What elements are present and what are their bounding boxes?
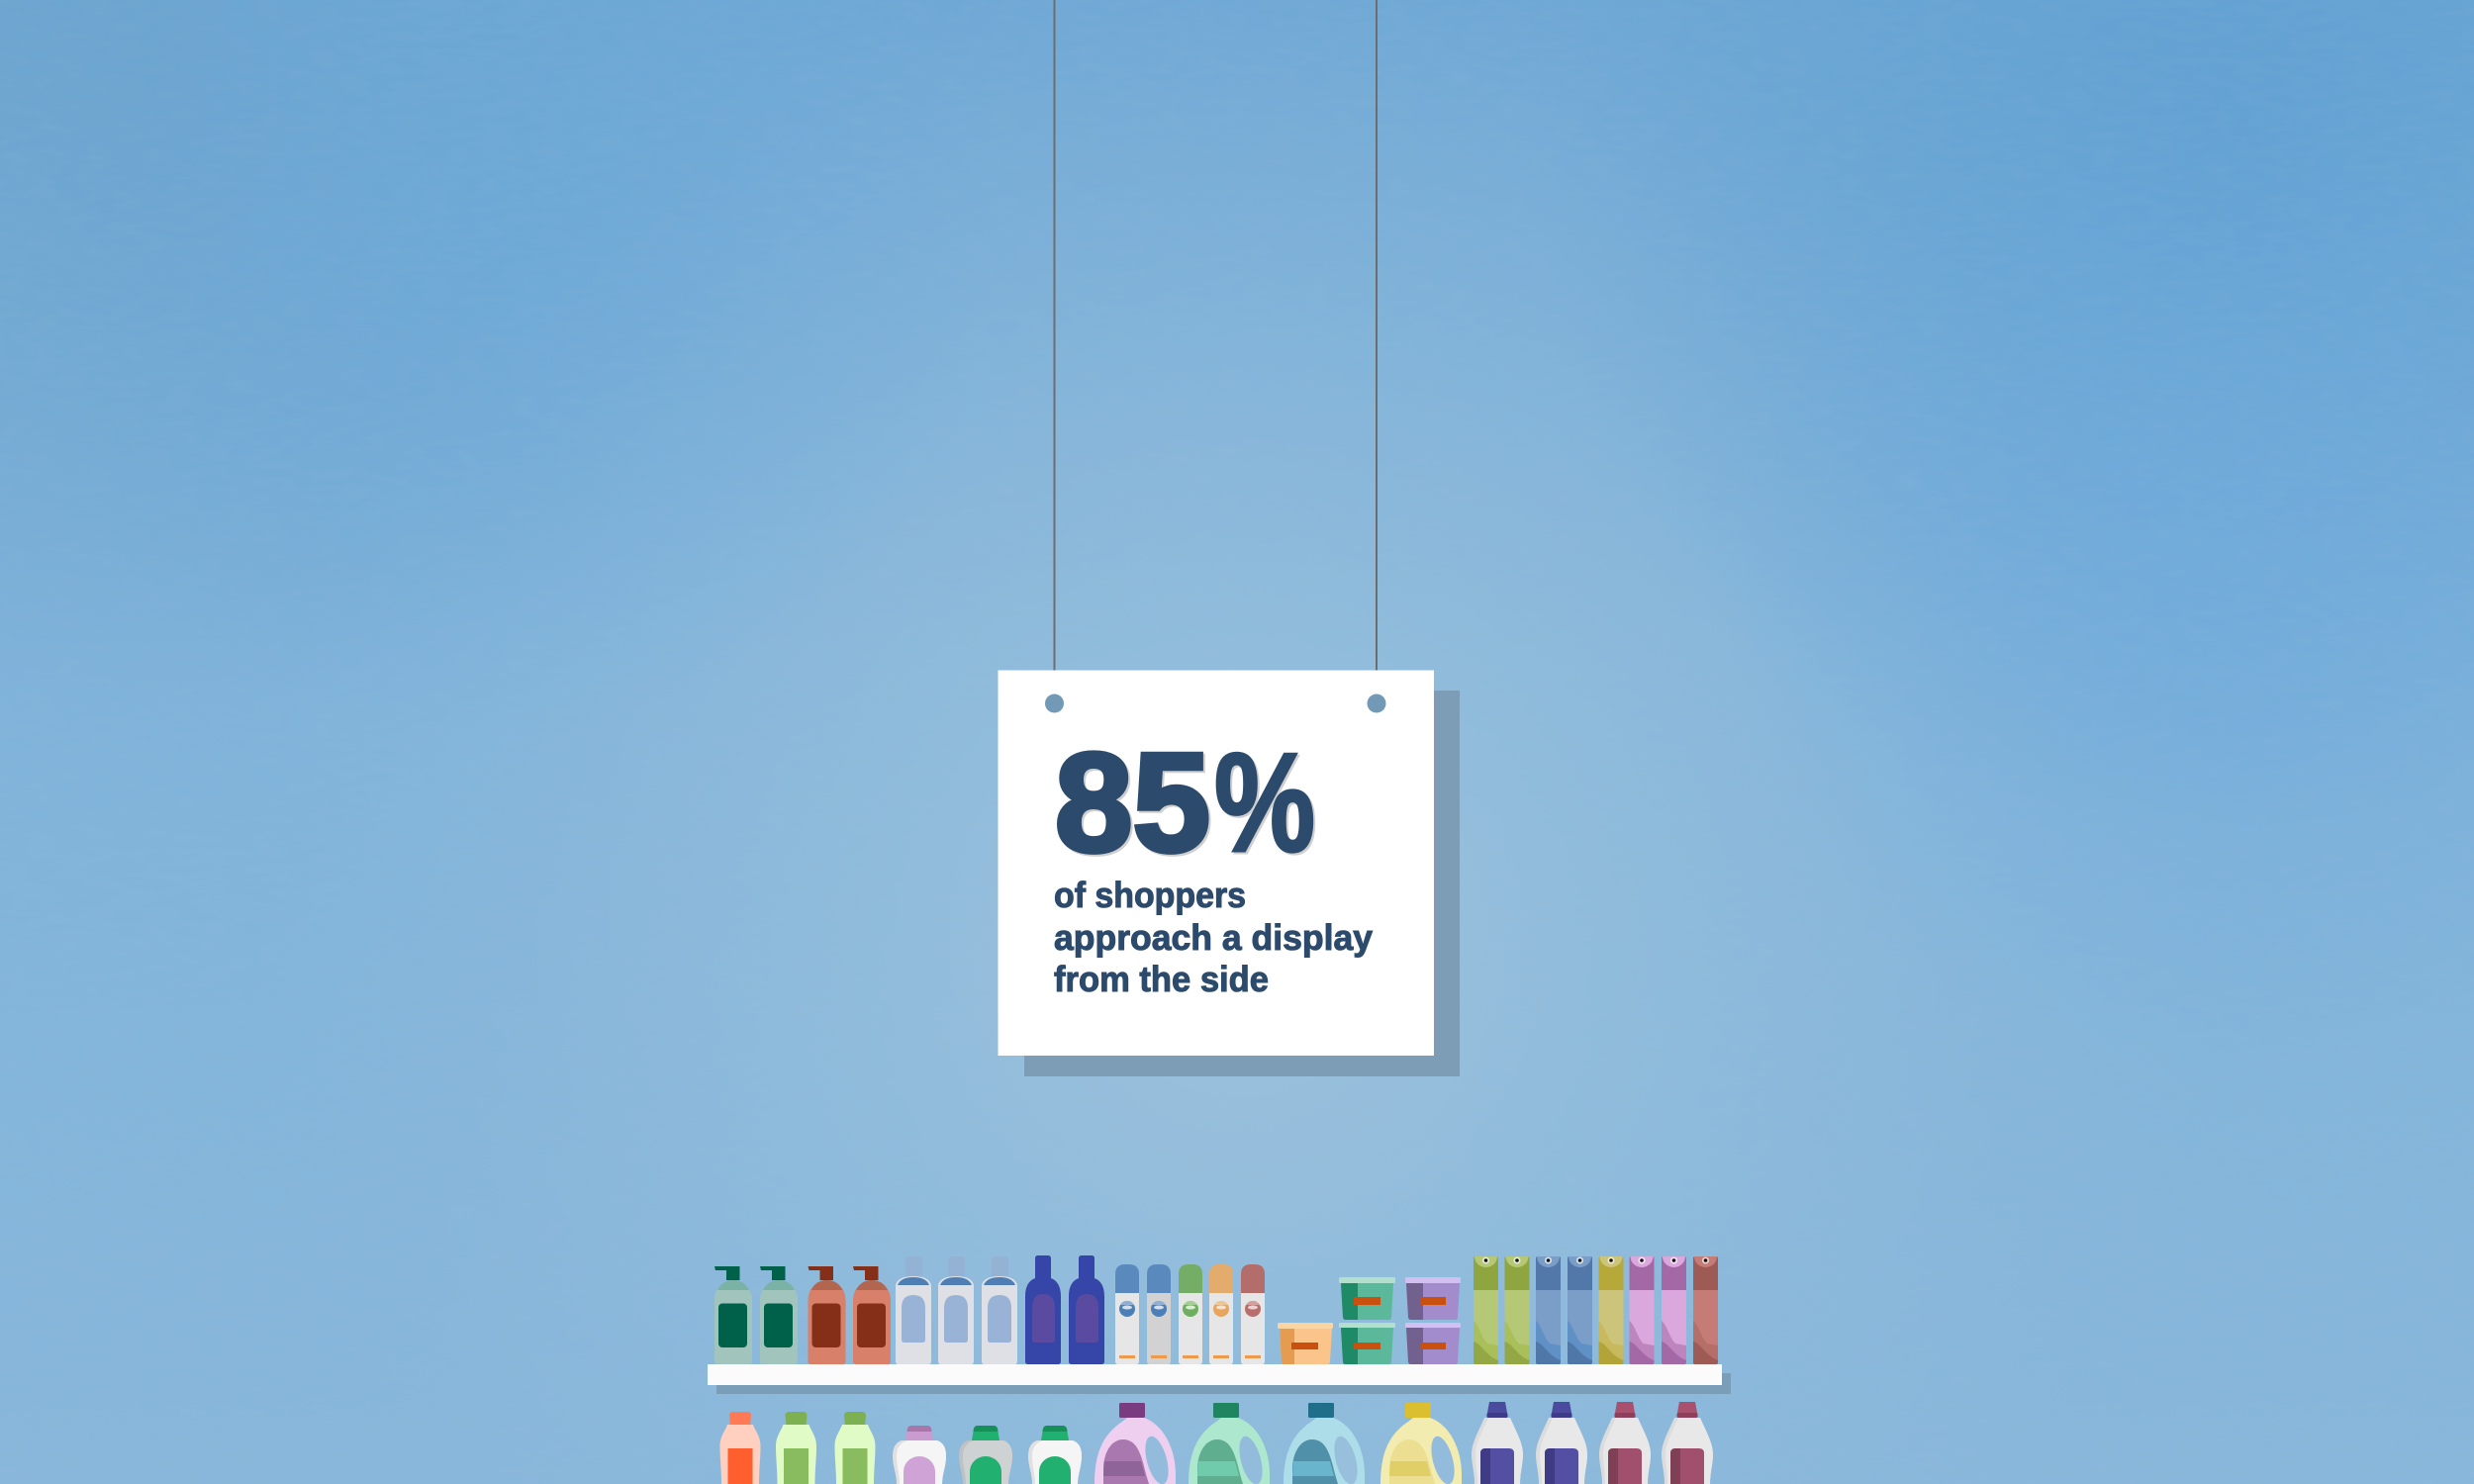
statistic: 85% bbox=[1055, 724, 1317, 883]
rounded bottles bbox=[893, 1426, 1082, 1484]
shelf board bbox=[708, 1364, 1722, 1385]
tall packs: blue bbox=[1536, 1256, 1592, 1364]
sign shadow bbox=[1024, 691, 1460, 1076]
tall pack: red bbox=[1693, 1256, 1718, 1364]
top row products bbox=[714, 1255, 1718, 1364]
purple tubs bbox=[1405, 1277, 1461, 1364]
tapered bottles: red bbox=[1599, 1402, 1713, 1484]
orange tub bbox=[1278, 1323, 1333, 1364]
detergent jug: yellow bbox=[1380, 1403, 1462, 1484]
statistic: 85%: 85 bbox=[1057, 726, 1212, 883]
pump bottles: red bbox=[808, 1266, 891, 1364]
spray cans bbox=[1115, 1264, 1265, 1364]
statistic: 85%: % bbox=[1214, 724, 1315, 881]
statistic: 85%: % bbox=[1216, 726, 1317, 883]
bottom row products bbox=[720, 1402, 1713, 1484]
statistic: 85%: 85 bbox=[1055, 724, 1210, 881]
detergent jug: purple bbox=[1094, 1403, 1176, 1484]
hanging ropes bbox=[1055, 0, 1377, 671]
tall packs: pink bbox=[1629, 1256, 1686, 1364]
tall packs: green bbox=[1474, 1256, 1530, 1364]
statistic description: of shoppers bbox=[1054, 875, 1246, 915]
tapered bottles: blue bbox=[1472, 1402, 1587, 1484]
sign card bbox=[998, 671, 1434, 1056]
detergent jug: blue bbox=[1284, 1403, 1365, 1484]
pump bottles: green bbox=[714, 1266, 798, 1364]
statistic description: approach a display bbox=[1054, 917, 1373, 958]
white bottles with blue labels bbox=[896, 1256, 1017, 1364]
statistic description bbox=[1054, 875, 1373, 999]
detergent jug: green bbox=[1189, 1403, 1270, 1484]
sign holes bbox=[1045, 695, 1385, 712]
statistic description: from the side bbox=[1054, 959, 1269, 999]
shelf bbox=[708, 1364, 1731, 1394]
dark blue bottles bbox=[1025, 1255, 1104, 1364]
small curved bottles bbox=[720, 1412, 875, 1484]
shelf shadow bbox=[716, 1373, 1731, 1394]
green tubs bbox=[1339, 1277, 1395, 1364]
hanging sign bbox=[998, 0, 1460, 1076]
tall pack: yellow bbox=[1599, 1256, 1623, 1364]
